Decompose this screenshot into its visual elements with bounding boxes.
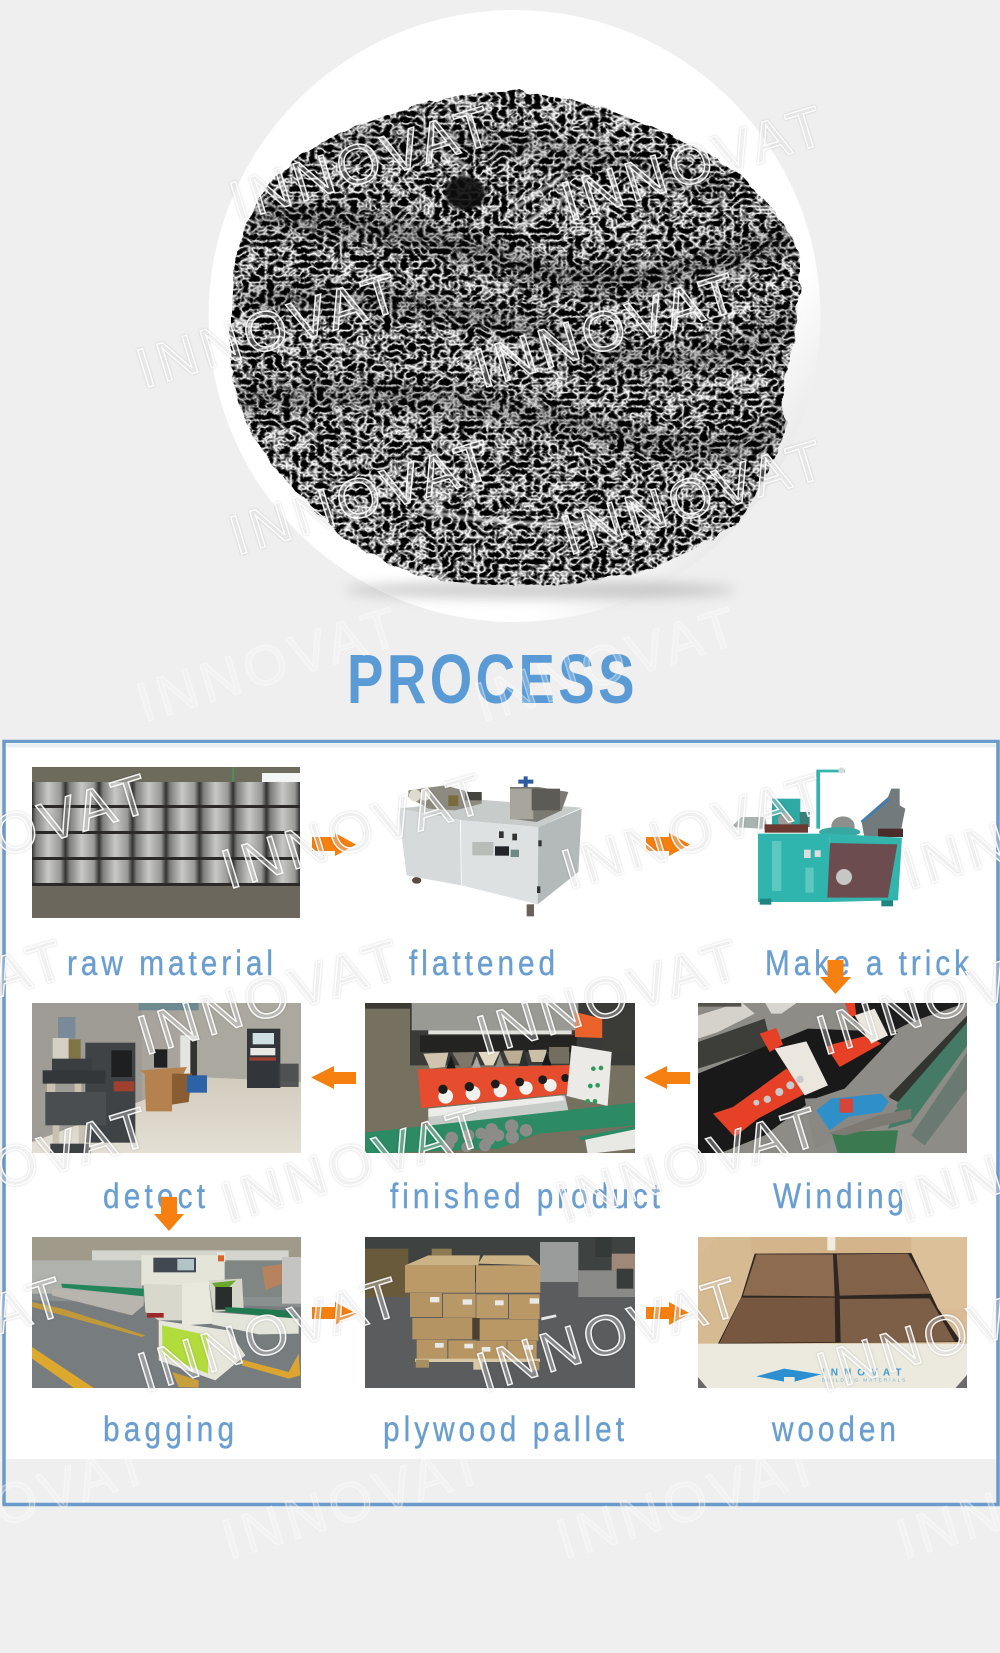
arrow: detect down to bagging [154,1197,184,1231]
watermark: INNOVAT outlines over photos and panel: INNOVAT [214,1095,491,1234]
product image: steel wool scrubber in white circle [208,10,820,622]
watermark: INNOVAT outlines over photos and panel [0,94,1000,1404]
arrow: plywood pallet to wooden [646,1302,690,1325]
watermark: INNOVAT outlines over photos and panel: INNOVAT [214,762,491,901]
arrow: raw material to flattened [312,833,356,856]
photo: bagging machine [32,1237,301,1388]
watermark: INNOVAT outlines over photos and panel: INNOVAT [469,1265,746,1404]
label: bagging: bagging [103,1410,234,1449]
photo: wire trick machine [732,768,906,906]
watermark: INNOVAT outlines over photos and panel: INNOVAT [469,928,746,1067]
arrow: make a trick down to winding [820,960,851,994]
watermark: faint INNOVAT outlines on grey background: INNOVAT [549,1432,826,1571]
watermark: INNOVAT outlines over photos and panel: INNOVAT [467,261,744,400]
label: flattened: flattened [409,944,555,983]
photo: raw material spools [32,767,300,918]
photo: wooden crate [698,1237,967,1388]
panel: process steps [4,742,998,1504]
arrow: flattened to make a trick [646,833,690,856]
watermark: INNOVAT outlines over photos and panel: INNOVAT [129,261,406,400]
watermark: INNOVAT outlines over photos and panel: INNOVAT [554,428,831,567]
label: detect: detect [103,1177,205,1216]
title: PROCESS: PROCESS [347,641,638,719]
photo: wooden crate: INNOVAT [822,1368,908,1379]
watermark: INNOVAT outlines over photos and panel: INNOVAT [130,928,407,1067]
label: finished product: finished product [390,1177,660,1216]
watermark: INNOVAT outlines over photos and panel: INNOVAT [222,94,499,233]
watermark: INNOVAT outlines over photos and panel: INNOVAT [549,1095,826,1234]
photo: wooden crate: BUILDING MATERIALS [822,1378,907,1383]
photo: boxes on plywood pallet [365,1237,635,1388]
label: Winding: Winding [773,1177,904,1216]
photo: testing equipment room [32,1003,301,1153]
watermark: INNOVAT outlines over photos and panel: INNOVAT [554,762,831,901]
arrow: finished product to detect [311,1066,356,1089]
watermark: faint INNOVAT outlines on grey background: INNOVAT [214,1432,491,1571]
watermark: faint INNOVAT outlines on grey background: INNOVAT [467,595,744,734]
arrow: winding to finished product [644,1066,690,1089]
label: Make a trick: Make a trick [765,944,970,983]
watermark: faint INNOVAT outlines on grey background: INNOVAT [129,595,406,734]
label: wooden: wooden [771,1410,896,1449]
photo: flattening machine [398,776,582,916]
photo: finished product line [365,1003,635,1153]
watermark: INNOVAT outlines over photos and panel: INNOVAT [130,1265,407,1404]
label: plywood pallet: plywood pallet [383,1410,624,1449]
arrow: bagging to plywood pallet [312,1302,356,1325]
label: raw material: raw material [67,944,273,983]
watermark: INNOVAT outlines over photos and panel: INNOVAT [222,428,499,567]
watermark: faint INNOVAT outlines on grey background [0,595,1000,1571]
photo: winding machines [698,1003,967,1153]
watermark: INNOVAT outlines over photos and panel: INNOVAT [554,94,831,233]
